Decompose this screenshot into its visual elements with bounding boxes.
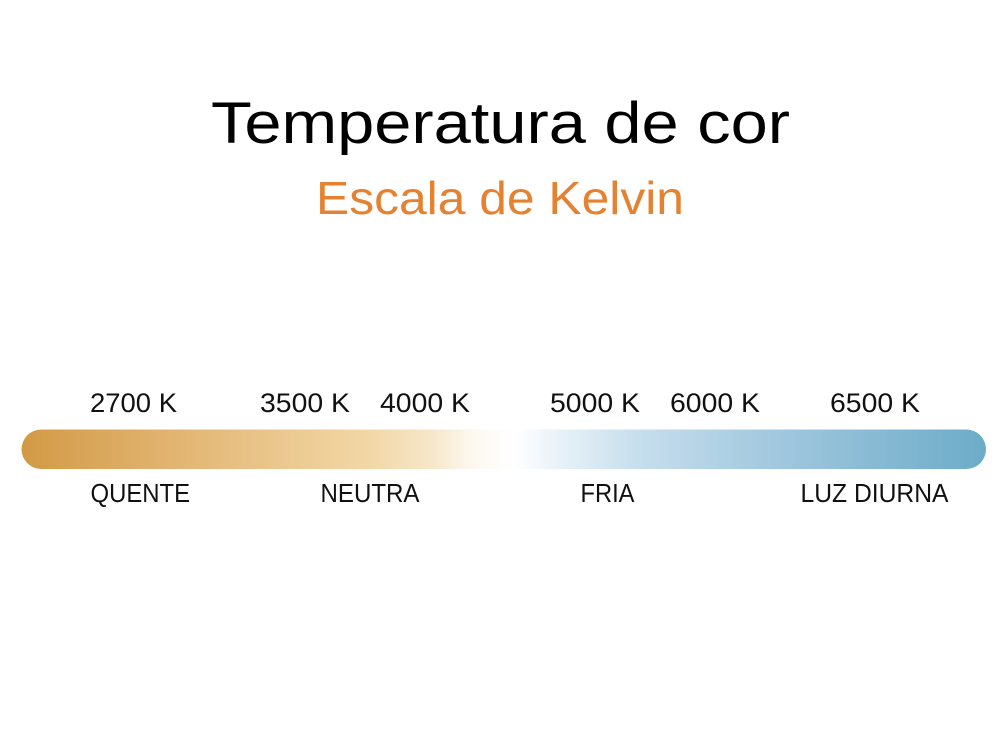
label: FRIA: FRIA <box>580 478 635 508</box>
label: NEUTRA: NEUTRA <box>320 478 420 508</box>
label: 3500 K: 3500 K <box>260 388 350 418</box>
label: 5000 K: 5000 K <box>550 388 640 418</box>
kelvin value labels <box>90 388 920 418</box>
label: QUENTE: QUENTE <box>90 478 190 508</box>
label: 6500 K: 6500 K <box>830 388 920 418</box>
label: LUZ DIURNA: LUZ DIURNA <box>800 478 949 508</box>
label: 4000 K: 4000 K <box>380 388 470 418</box>
category labels <box>90 478 949 508</box>
label: 2700 K: 2700 K <box>90 388 177 418</box>
label: 6000 K: 6000 K <box>670 388 760 418</box>
title: Temperatura de cor <box>211 91 790 156</box>
gradient bar: warm to cool <box>22 430 986 469</box>
subtitle: Escala de Kelvin <box>316 172 684 224</box>
